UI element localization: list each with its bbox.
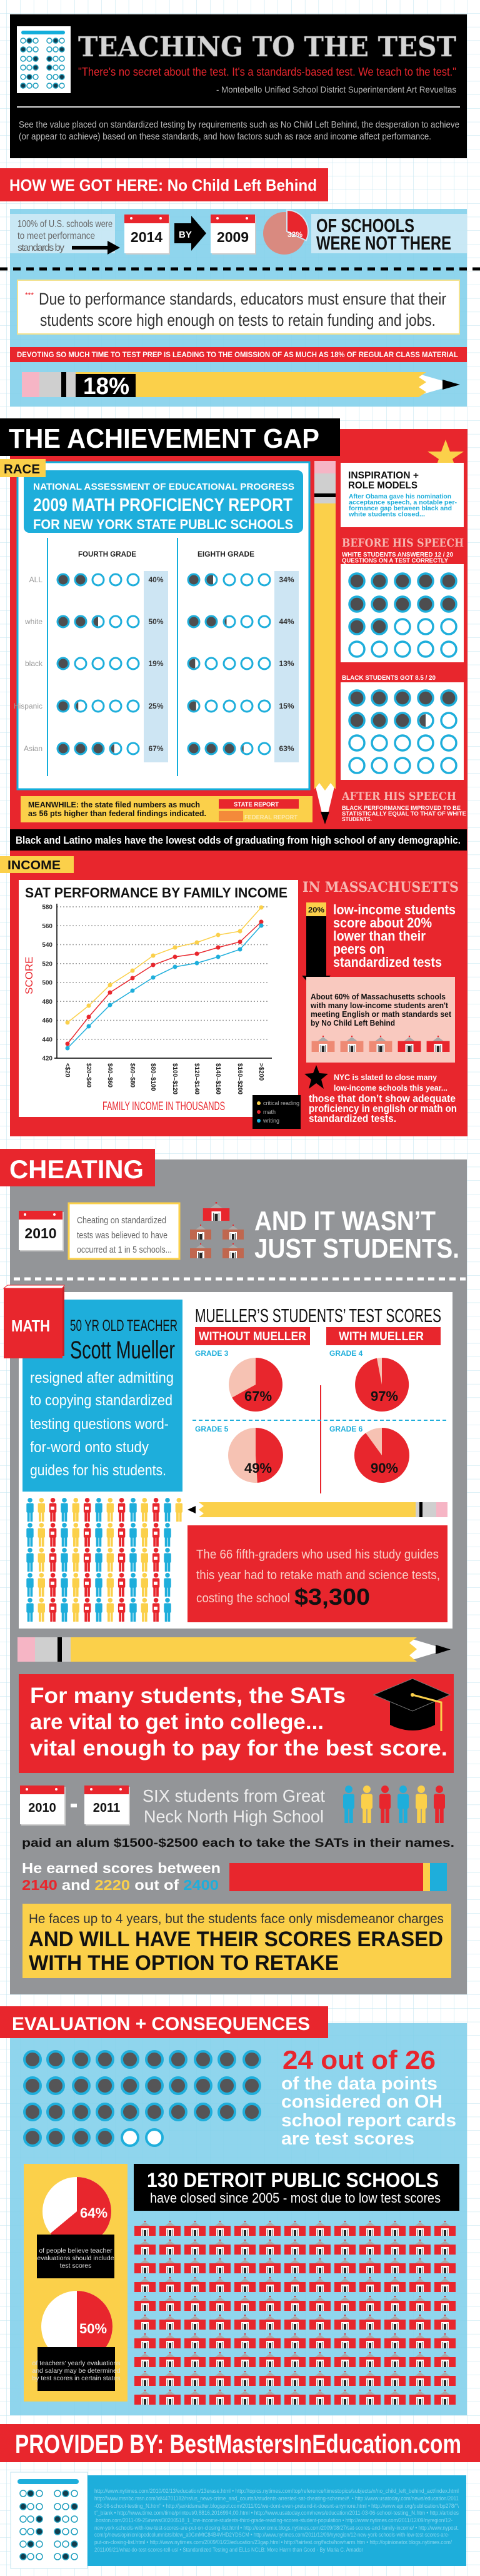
panel: scott mueller case: WITH MUELLER bbox=[339, 1330, 424, 1343]
text: low-income students: standardized tests bbox=[333, 954, 442, 970]
callout: 1 in 5 schools bbox=[69, 1203, 179, 1259]
chart: SAT performance by family income: 560 bbox=[42, 923, 52, 930]
stat: 24 out of 26: of the data points bbox=[281, 2074, 438, 2094]
callout: SATs vital: vital enough to pay for the best score. bbox=[30, 1736, 448, 1760]
callout: massachusetts schools bbox=[306, 977, 455, 1063]
chart: SAT performance by family income: SAT PERFORMANCE BY FAMILY INCOME bbox=[25, 885, 288, 901]
percentages: 19% bbox=[148, 659, 164, 668]
header panel bbox=[10, 14, 467, 158]
panel: scott mueller case: GRADE 3 bbox=[195, 1349, 229, 1358]
text: low-income students: low-income students bbox=[333, 902, 456, 917]
teacher bio box: guides for his students. bbox=[30, 1462, 166, 1479]
text: NYC closings: proficiency in english or math on bbox=[309, 1103, 457, 1114]
callout: scores erased bbox=[22, 1904, 451, 1978]
label: race: RACE bbox=[4, 462, 40, 477]
stat: 24 out of 26: are test scores bbox=[281, 2129, 414, 2149]
caption: 50%: of teachers' yearly evaluations bbox=[32, 2360, 120, 2367]
banner: 18% omission bbox=[10, 347, 467, 362]
text: low-income students: lower than their bbox=[333, 928, 426, 944]
percentages: 34% bbox=[279, 575, 294, 584]
text: NYC closings bbox=[309, 1073, 457, 1124]
heading: after his speech: BLACK PERFORMANCE IMPROVED TO BE bbox=[342, 805, 461, 812]
chart: SAT performance by family income: 580 bbox=[42, 904, 52, 911]
heading: and it wasn't just students bbox=[254, 1206, 459, 1264]
sources: put-on-closing-list.html • http://www.nytimes.com/2009/01/23/education/23gap.html • http://fairtest.org/facts/howharm.htm • http://opinionator.blogs.nytimes.com/ bbox=[94, 2539, 452, 2545]
text: six students: SIX students from Great bbox=[142, 1786, 325, 1806]
x-axis labels: $100–$120 bbox=[171, 1063, 178, 1094]
x-axis labels: <$20 bbox=[64, 1063, 71, 1078]
section heading: cheating: CHEATING bbox=[9, 1154, 144, 1184]
pie: grade 5 49% bbox=[228, 1428, 283, 1483]
panel: inspiration + role models bbox=[341, 463, 464, 527]
stat: 24 out of 26: considered on OH bbox=[281, 2092, 442, 2112]
percentages: 40% bbox=[148, 575, 164, 584]
x-axis labels: $80–$100 bbox=[149, 1063, 156, 1091]
pencil: 18% bbox=[22, 372, 460, 400]
x-axis labels bbox=[64, 1063, 264, 1094]
caption: 50%: by test scores in certain states bbox=[32, 2375, 121, 2382]
pie: 64%: 64% bbox=[80, 2205, 108, 2221]
teacher bio box: resigned after admitting bbox=[30, 1370, 174, 1386]
callout: $3,300: The 66 fifth-graders who used his study guides bbox=[196, 1548, 439, 1562]
teacher bio box: testing questions word- bbox=[30, 1416, 169, 1433]
label: race bbox=[0, 459, 46, 477]
teacher bio box: 50 YR OLD TEACHER bbox=[70, 1317, 178, 1335]
arrow: BY bbox=[174, 216, 206, 251]
caption: 64% bbox=[37, 2235, 114, 2278]
heading: in massachusetts: IN MASSACHUSETTS bbox=[302, 879, 459, 896]
icon: graduation cap bbox=[374, 1679, 450, 1731]
callout: meanwhile state report: STATE REPORT bbox=[234, 802, 279, 808]
text: NYC closings: standardized tests. bbox=[309, 1113, 396, 1124]
chart: SAT performance by family income: 460 bbox=[42, 1018, 52, 1024]
chart: SAT performance by family income: 420 bbox=[42, 1056, 52, 1062]
icons: schools (1 in 5) bbox=[190, 1202, 244, 1258]
x-axis labels: >$200 bbox=[258, 1063, 264, 1081]
title: TEACHING TO THE TEST bbox=[78, 31, 456, 63]
pie: grade 6 90%: 90% bbox=[371, 1460, 398, 1476]
callout: 1 in 5 schools: tests was believed to have bbox=[77, 1230, 168, 1241]
banner: 130 detroit schools: 130 DETROIT PUBLIC SCHOOLS bbox=[147, 2169, 439, 2191]
x-axis labels: $60–$80 bbox=[129, 1063, 136, 1088]
pie: 64% bbox=[42, 2177, 111, 2246]
panel: no child left behind bbox=[0, 209, 480, 407]
stat: 24 out of 26: school report cards bbox=[281, 2111, 456, 2131]
section heading: achievement gap: THE ACHIEVEMENT GAP bbox=[9, 423, 319, 454]
heading: before his speech: QUESTIONS ON A TEST CORRECTLY bbox=[342, 558, 448, 564]
callout: meanwhile state report: as 56 pts higher than federal findings indicated. bbox=[28, 809, 206, 818]
pie: grade 5 49%: 49% bbox=[244, 1460, 272, 1476]
panel: inspiration + role models: formance gap between black and bbox=[349, 505, 452, 512]
caption: 64%: of people believe teacher bbox=[39, 2247, 112, 2255]
teacher bio box bbox=[22, 1300, 182, 1492]
text: of schools were not there bbox=[316, 215, 451, 254]
calendar 2009: 2009 bbox=[217, 229, 249, 245]
panel: inspiration + role models: white students closed... bbox=[348, 510, 425, 518]
legend: writing bbox=[262, 1118, 279, 1124]
pencil: large bbox=[18, 1637, 451, 1662]
line: writing bbox=[66, 924, 263, 1050]
label: income bbox=[0, 856, 74, 873]
chart: SAT performance by family income: SCORE bbox=[23, 957, 35, 994]
pie chart 32%: 32% bbox=[288, 230, 302, 239]
callout: $3,300: $3,300 bbox=[294, 1584, 370, 1610]
panel: evaluation + consequences bbox=[10, 2023, 467, 2415]
text: 100% of schools: standards by bbox=[18, 243, 64, 253]
arrow: 20% lower: 20% bbox=[308, 906, 324, 914]
callout: meanwhile state report bbox=[21, 796, 312, 822]
percentages: 44% bbox=[279, 617, 294, 626]
icon: star bbox=[428, 440, 464, 472]
text: of schools were not there: OF SCHOOLS bbox=[316, 215, 414, 236]
icon: black star bbox=[304, 1065, 328, 1089]
panel: teacher evaluation pies bbox=[24, 2164, 128, 2402]
teacher bio box: Scott Mueller bbox=[70, 1336, 175, 1364]
stat: 24 out of 26 bbox=[281, 2045, 456, 2149]
bar: score comparison bbox=[229, 1863, 447, 1891]
stat: 24 out of 26: 24 out of 26 bbox=[282, 2045, 436, 2074]
banner: 18% omission: DEVOTING SO MUCH TIME TO TEST PREP IS LEADING TO THE OMISSION OF AS MUCH AS 18% OF REGULAR CLASS MATERIAL bbox=[17, 351, 458, 359]
panel: inspiration + role models: After Obama gave his nomination bbox=[349, 493, 451, 500]
label: income: INCOME bbox=[8, 859, 61, 872]
column headers: EIGHTH GRADE bbox=[198, 550, 254, 558]
percentages: 67% bbox=[148, 744, 164, 753]
icons: six students bbox=[343, 1786, 445, 1823]
panel: inspiration + role models: ROLE MODELS bbox=[348, 480, 418, 491]
pencil: 18%: 18% bbox=[83, 373, 129, 400]
row labels bbox=[14, 575, 43, 753]
chart: SAT performance by family income bbox=[19, 880, 301, 1129]
callout: scores erased: He faces up to 4 years, but the students face only misdemeanor charges bbox=[29, 1912, 444, 1926]
panel: achievement gap (red) bbox=[10, 429, 468, 1136]
callout: meanwhile state report: FEDERAL REPORT bbox=[244, 814, 298, 821]
x-axis labels: $160–$200 bbox=[236, 1063, 243, 1094]
callout: performance standards bbox=[18, 280, 459, 334]
dot grid: black students 8.5/20 bbox=[341, 682, 464, 780]
arrow: BY: BY bbox=[179, 230, 192, 240]
x-axis labels: $120–$140 bbox=[193, 1063, 200, 1094]
callout: $3,300 bbox=[188, 1525, 448, 1622]
heading: before his speech bbox=[342, 537, 464, 564]
people grid: 66 fifth graders bbox=[25, 1498, 185, 1623]
callout: meanwhile state report: MEANWHILE: the state filed numbers as much bbox=[28, 800, 200, 809]
text: NYC closings: those that don’t show adequate bbox=[309, 1093, 456, 1104]
chart: SAT performance by family income: 520 bbox=[42, 961, 52, 967]
row labels: Asian bbox=[24, 744, 42, 753]
text: six students bbox=[142, 1786, 325, 1826]
line: critical reading bbox=[66, 906, 263, 1024]
percentages: 50% bbox=[148, 617, 164, 626]
callout: SATs vital bbox=[19, 1674, 454, 1773]
pie chart 32% bbox=[263, 210, 308, 255]
row labels: black bbox=[25, 659, 43, 668]
heading: and it wasn't just students: AND IT WASN’T bbox=[254, 1206, 436, 1236]
icon: answer sheet footer bbox=[11, 2472, 88, 2568]
heading: after his speech: STATISTICALLY EQUAL TO THAT OF WHITE bbox=[342, 811, 466, 817]
pie: grade 3 67% bbox=[229, 1358, 282, 1412]
panel: cheating (grey) bbox=[10, 1159, 467, 1994]
text: low-income students: peers on bbox=[333, 941, 384, 957]
callout: massachusetts schools: with many low-income students aren't bbox=[310, 1001, 449, 1010]
callout: scores erased: AND WILL HAVE THEIR SCORES ERASED bbox=[29, 1927, 443, 1951]
banner: 130 detroit schools: have closed since 2005 - most due to low test scores bbox=[150, 2190, 441, 2206]
caption: 50% bbox=[32, 2347, 121, 2391]
chart: SAT performance by family income: 540 bbox=[42, 942, 52, 949]
pie: grade 6 90% bbox=[354, 1428, 409, 1483]
percentages: 63% bbox=[279, 744, 294, 753]
calendar 2014: 2014 bbox=[131, 229, 162, 245]
row labels: Hispanic bbox=[14, 702, 42, 710]
caption: black students 8.5/20: BLACK STUDENTS GOT 8.5 / 20 bbox=[342, 675, 436, 682]
callout: SATs vital: are vital to get into college... bbox=[30, 1710, 324, 1734]
banner: 130 detroit schools bbox=[134, 2164, 459, 2211]
column headers bbox=[78, 550, 254, 558]
heading: after his speech bbox=[341, 790, 466, 823]
text: NYC closings: NYC is slated to close many bbox=[334, 1073, 438, 1082]
calendars 2010-2011: 2010 bbox=[28, 1801, 56, 1815]
dot grid: 24 of 26 bbox=[24, 2051, 260, 2146]
icon: math book: MATH bbox=[11, 1316, 50, 1335]
arrow: 20% lower bbox=[302, 902, 331, 992]
callout: massachusetts schools: About 60% of Massachusetts schools bbox=[311, 992, 446, 1001]
text: six students: Neck North High School bbox=[144, 1807, 324, 1826]
icon: answer sheet bbox=[17, 26, 71, 93]
callout: scores erased: WITH THE OPTION TO RETAKE bbox=[29, 1951, 339, 1975]
pencil: small bbox=[188, 1502, 448, 1517]
pie: grade 4 97% bbox=[355, 1358, 409, 1412]
callout: massachusetts schools: by No Child Left Behind bbox=[311, 1018, 395, 1028]
callout: $3,300: costing the school bbox=[196, 1592, 290, 1605]
text: NYC closings: low-income schools this year... bbox=[334, 1083, 448, 1093]
percentages: 15% bbox=[279, 702, 294, 710]
section heading: evaluation + consequences: EVALUATION + CONSEQUENCES bbox=[12, 2014, 310, 2034]
text: 100% of schools bbox=[18, 219, 112, 253]
text: paid an alum: paid an alum $1500-$2500 each to take the SATs in their names. bbox=[22, 1837, 454, 1850]
panel: scott mueller case: WITHOUT MUELLER bbox=[199, 1330, 306, 1343]
teacher bio box: for-word onto study bbox=[30, 1439, 149, 1456]
attribution: - Montebello Unified School District Superintendent Art Revueltas bbox=[216, 84, 456, 94]
pie: grade 4 97%: 97% bbox=[371, 1388, 398, 1404]
percentages bbox=[148, 575, 294, 753]
heading: after his speech: STUDENTS. bbox=[342, 816, 372, 823]
callout: $3,300: this year had to retake math and science tests, bbox=[196, 1568, 440, 1582]
pencil: vertical bbox=[314, 461, 336, 824]
chart header bbox=[24, 470, 303, 533]
caption: 64%: evaluations should include bbox=[37, 2255, 114, 2262]
arrow bbox=[72, 241, 120, 255]
panel: scott mueller case: GRADE 6 bbox=[329, 1425, 363, 1433]
row labels: ALL bbox=[29, 575, 42, 584]
panel: scott mueller case bbox=[4, 1285, 452, 1629]
intro text: (or appear to achieve) based on these standards, and how factors such as race and income affect performance. bbox=[19, 131, 431, 142]
section heading: evaluation + consequences bbox=[0, 2006, 328, 2038]
text: 100% of schools: 100% of U.S. schools were bbox=[18, 219, 112, 230]
caption: 64%: test scores bbox=[60, 2262, 91, 2270]
callout: 1 in 5 schools: occurred at 1 in 5 schools... bbox=[77, 1245, 172, 1255]
panel: NAEP math proficiency chart bbox=[14, 462, 309, 789]
percentages: 25% bbox=[148, 702, 164, 710]
quote: "There's no secret about the test. It's a standards-based test. We teach to the test." bbox=[78, 66, 456, 78]
section heading: cheating bbox=[0, 1149, 155, 1186]
caption: 50%: and salary may be determined bbox=[32, 2367, 121, 2375]
x-axis labels: $20–$40 bbox=[85, 1063, 92, 1088]
panel: scott mueller case: GRADE 5 bbox=[195, 1425, 229, 1433]
icon: math book bbox=[4, 1285, 64, 1358]
heading: before his speech: BEFORE HIS SPEECH bbox=[342, 537, 464, 550]
chart: SAT performance by family income: 440 bbox=[42, 1036, 52, 1043]
sources bbox=[88, 2475, 466, 2566]
callout: massachusetts schools: meeting English or math standards set bbox=[311, 1009, 452, 1019]
calendar 2009 bbox=[211, 215, 256, 255]
dot matrix bbox=[58, 574, 270, 754]
line: math bbox=[66, 920, 263, 1046]
pie: 50% bbox=[41, 2291, 112, 2362]
row labels: white bbox=[24, 617, 42, 626]
icons: 130 closed schools bbox=[134, 2218, 459, 2406]
calendars 2010-2011 bbox=[20, 1786, 130, 1826]
calendar 2010: 2010 bbox=[24, 1225, 57, 1241]
chart: SAT performance by family income: FAMILY INCOME IN THOUSANDS bbox=[102, 1100, 225, 1113]
text: 100% of schools: to meet performance bbox=[18, 231, 95, 241]
dot grid: white students 12/20 bbox=[341, 564, 464, 662]
panel: scott mueller case: GRADE 4 bbox=[329, 1349, 363, 1358]
x-axis labels: $40–$60 bbox=[106, 1063, 113, 1088]
callout: performance standards: *** bbox=[25, 291, 34, 300]
panel: inspiration + role models: INSPIRATION + bbox=[348, 470, 419, 481]
section heading: how we got here bbox=[0, 168, 328, 201]
icons: schools bbox=[312, 1036, 449, 1052]
chart: SAT performance by family income: 480 bbox=[42, 999, 52, 1006]
callout: 1 in 5 schools: Cheating on standardized bbox=[77, 1215, 166, 1226]
callout: SATs vital: For many students, the SATs bbox=[30, 1684, 346, 1708]
text: low-income students: score about 20% bbox=[333, 915, 432, 931]
legend: math bbox=[263, 1109, 276, 1115]
x-axis labels: $140–$160 bbox=[214, 1063, 221, 1094]
calendar 2010 bbox=[19, 1211, 64, 1251]
text: scores between bbox=[22, 1860, 221, 1893]
text: scores between: He earned scores between bbox=[22, 1860, 221, 1876]
section heading: how we got here: HOW WE GOT HERE: No Child Left Behind bbox=[9, 176, 317, 194]
heading: after his speech: AFTER HIS SPEECH bbox=[341, 790, 456, 803]
chart header: FOR NEW YORK STATE PUBLIC SCHOOLS bbox=[33, 517, 293, 532]
legend bbox=[252, 1095, 301, 1129]
teacher bio box: to copying standardized bbox=[30, 1392, 172, 1409]
pie: grade 3 67%: 67% bbox=[244, 1388, 272, 1404]
legend: critical reading bbox=[263, 1100, 299, 1106]
calendars 2010-2011: 2011 bbox=[93, 1801, 120, 1815]
calendar 2014 bbox=[124, 215, 170, 255]
percentages: 13% bbox=[279, 659, 294, 668]
text: scores between: 2140 and 2220 out of 2400 bbox=[22, 1877, 219, 1893]
column headers: FOURTH GRADE bbox=[78, 550, 136, 558]
heading: before his speech: WHITE STUDENTS ANSWERED 12 / 20 bbox=[342, 552, 453, 558]
intro text bbox=[19, 119, 459, 142]
chart header: 2009 MATH PROFICIENCY REPORT bbox=[33, 495, 292, 515]
banner: graduation odds bbox=[10, 829, 467, 851]
chart: SAT performance by family income: 500 bbox=[42, 979, 52, 987]
panel: inspiration + role models: acceptance speech, a notable per- bbox=[349, 499, 458, 507]
pie: 50%: 50% bbox=[79, 2321, 107, 2336]
sources: 2011/09/21/what-do-test-scores-tell-us/ • Standardized Testing and ELLs NCLB: More Harm than Good - By Maria C. Amador bbox=[94, 2547, 363, 2553]
chart header: NATIONAL ASSESSMENT OF EDUCATIONAL PROGRESS bbox=[33, 482, 294, 492]
text: low-income students bbox=[333, 902, 456, 970]
